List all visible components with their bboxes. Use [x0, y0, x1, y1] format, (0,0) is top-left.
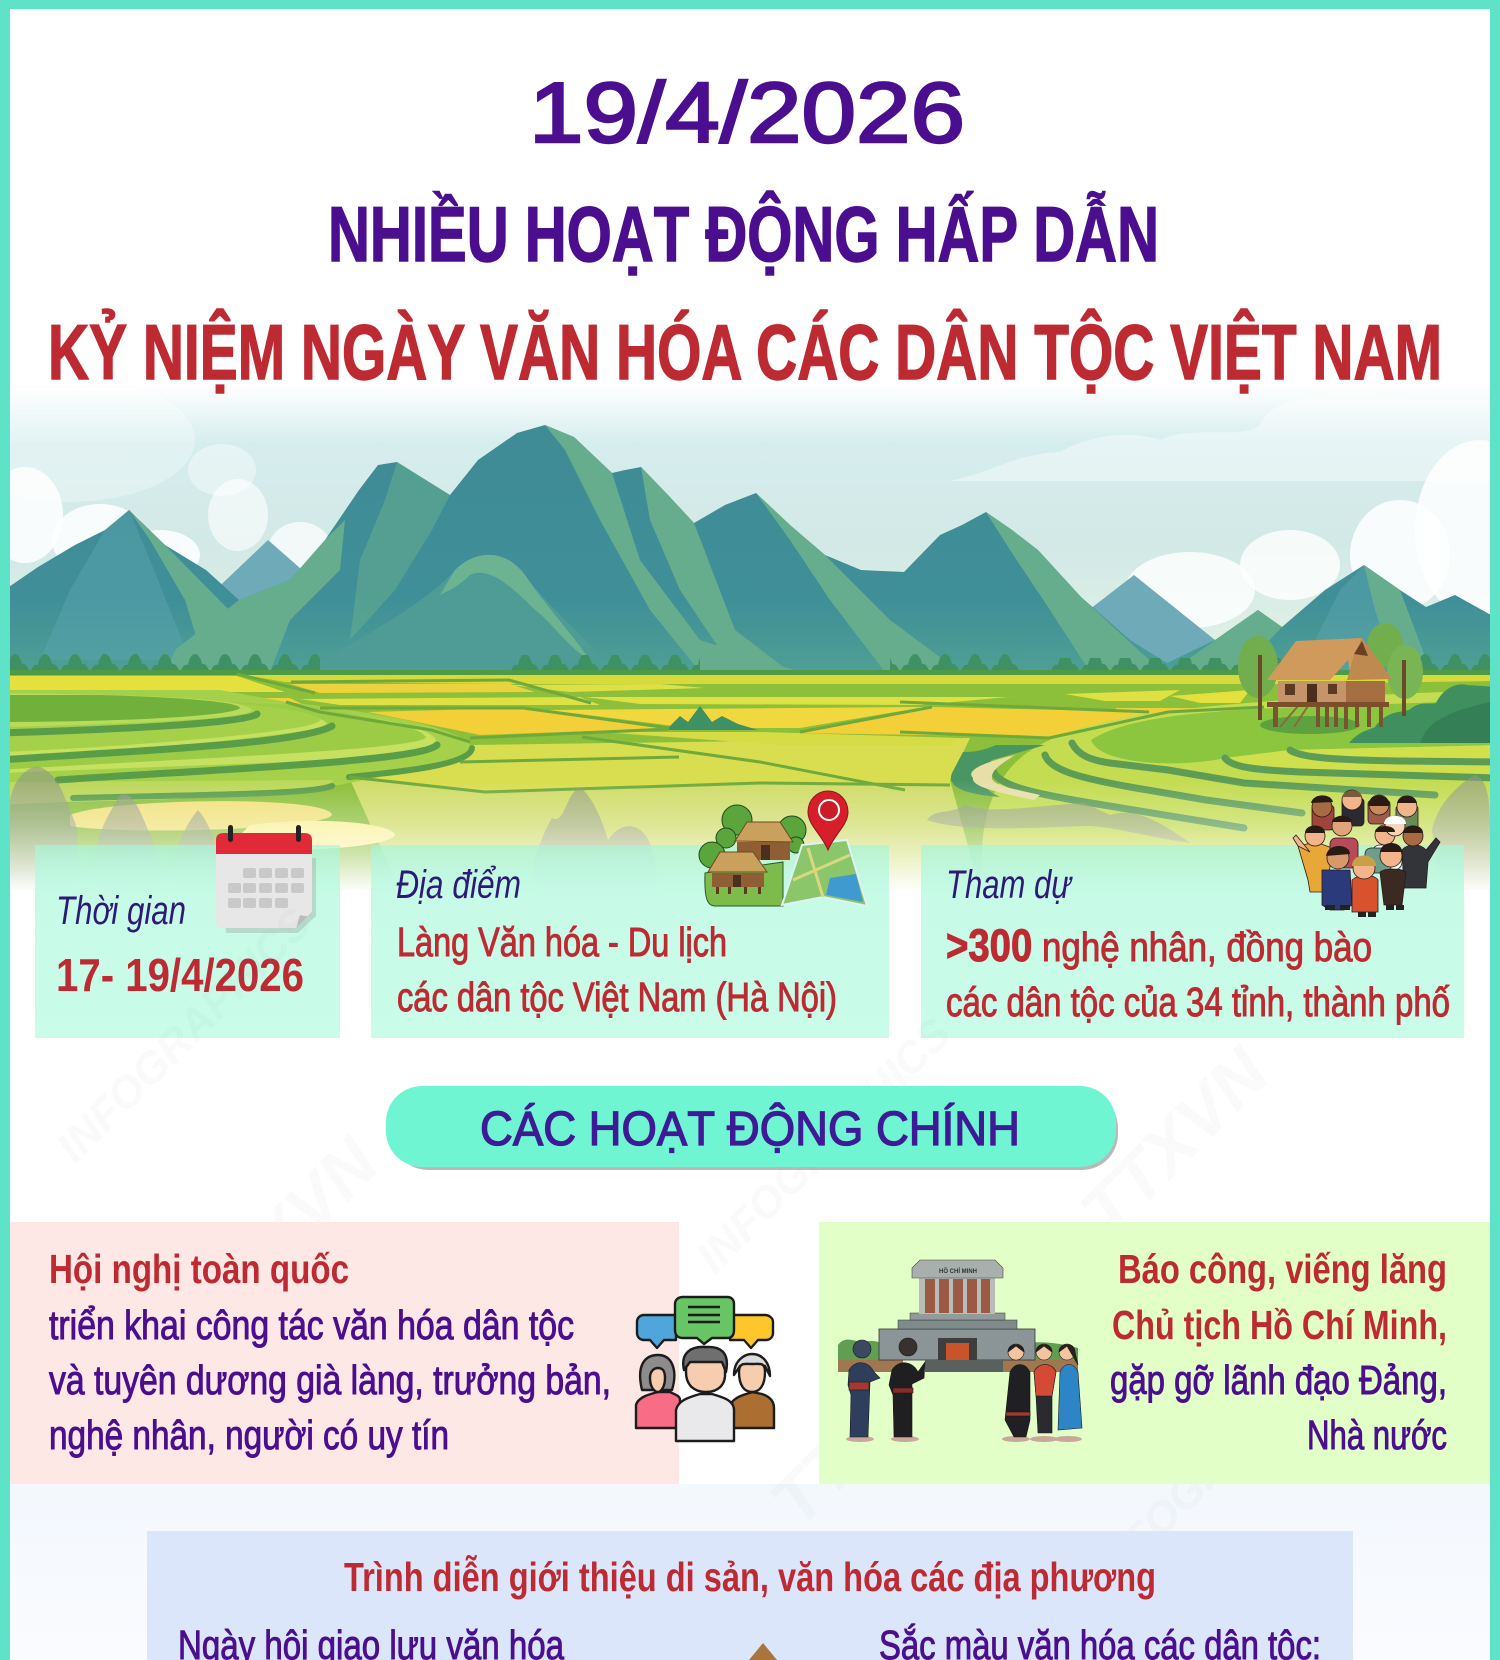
showcase heading: Trình diễn giới thiệu di sản, văn hóa các địa phương [344, 1554, 1156, 1600]
conference text [49, 1302, 611, 1458]
mountain lit faces [40, 510, 1420, 670]
foreground hazy trees [10, 767, 1490, 890]
icon: Ho Chi Minh mausoleum with visitors [838, 1260, 1082, 1442]
lower section background [10, 1484, 1490, 1660]
visit text: Nhà nước [1307, 1412, 1447, 1458]
pill label: CÁC HOẠT ĐỘNG CHÍNH [480, 1102, 1020, 1156]
location name line 2: các dân tộc Việt Nam (Hà Nội) [397, 974, 837, 1020]
pin [808, 791, 848, 850]
panel: attendance [921, 845, 1464, 1038]
back mountains [205, 540, 1240, 670]
foreground hill [300, 555, 612, 672]
icon: people talking [636, 1297, 774, 1441]
panel: national conference [10, 1222, 679, 1484]
scene fade to white [0, 780, 1500, 892]
visit text [1110, 1357, 1447, 1458]
attendance line 1: >300 nghệ nhân, đồng bào [946, 920, 1372, 971]
panel: location [371, 845, 889, 1038]
right terraces [951, 684, 1500, 890]
panel: time [35, 845, 340, 1038]
central field plots [0, 675, 1500, 890]
bush beside house [1349, 684, 1497, 743]
faint watermarks: TTXVN [175, 1122, 394, 1341]
icon: stilt house [1238, 623, 1423, 734]
bushes along road [951, 745, 1045, 797]
main mountain range [0, 425, 1500, 675]
faint watermarks: INFOGRAPHICS [687, 1009, 961, 1282]
mountain highlights [129, 425, 1430, 675]
faint watermarks: INFOGRAPHICS [47, 899, 321, 1172]
location name line 1: Làng Văn hóa - Du lịch [397, 919, 727, 965]
panel: mausoleum visit [819, 1222, 1490, 1484]
faint watermarks: INFOGRAPHICS [1082, 1324, 1356, 1597]
date value: 17- 19/4/2026 [56, 949, 304, 1001]
visitors [846, 1338, 1082, 1442]
rice fields base [0, 672, 1500, 890]
dirt road [971, 755, 1040, 800]
conference heading: Hội nghị toàn quốc [49, 1246, 349, 1292]
left terraces [0, 690, 472, 805]
faint watermarks: TTXVN [1065, 1032, 1284, 1251]
conference text: và tuyên dương già làng, trưởng bản, [49, 1357, 611, 1403]
icon: group of ethnic people [1293, 790, 1440, 917]
lower-left yellow terraces [70, 801, 332, 830]
label: tham du: Tham dự [946, 863, 1073, 907]
visit heading [1112, 1246, 1447, 1348]
landscape illustration [0, 378, 1500, 892]
panel: heritage showcase [147, 1531, 1353, 1660]
label: thoi gian: Thời gian [56, 889, 186, 933]
mausoleum inscription: HỒ CHÍ MINH [939, 1267, 977, 1275]
icon: calendar [216, 825, 316, 933]
tree line [0, 650, 320, 674]
heading: date: 19/4/2026 [529, 66, 965, 161]
conference text: nghệ nhân, người có uy tín [49, 1412, 449, 1458]
icon: roof tip [749, 1643, 777, 1660]
clouds [0, 378, 1500, 628]
icon: village and map pin [699, 791, 867, 906]
faint watermarks: TTXVN [755, 1322, 974, 1541]
heading: line 2: NHIỀU HOẠT ĐỘNG HẤP DẪN [328, 190, 1159, 278]
conference text: triển khai công tác văn hóa dân tộc [49, 1302, 574, 1348]
section heading pill [386, 1086, 1118, 1170]
field dividing dikes [237, 674, 1264, 792]
central small forest [666, 706, 758, 730]
faint watermarks [47, 899, 1356, 1597]
map [782, 840, 867, 906]
label: dia diem: Địa điểm [396, 863, 521, 907]
